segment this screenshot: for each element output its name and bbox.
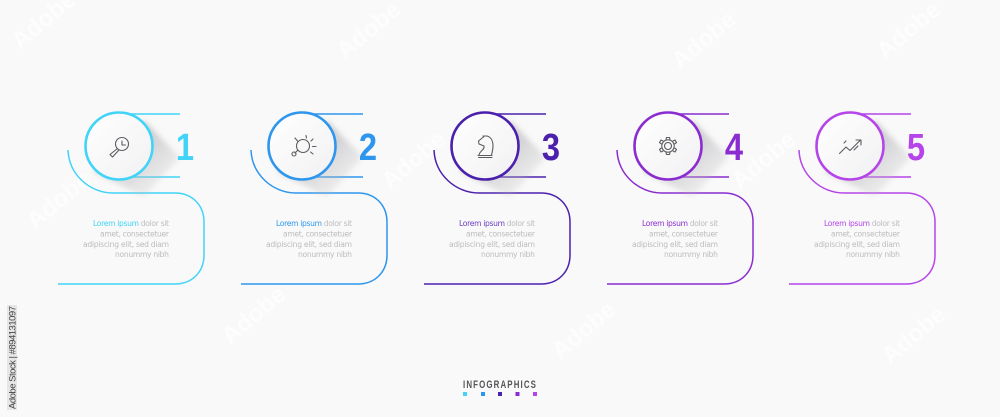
step 4 outline path [607, 150, 753, 284]
icon: light bulb [292, 136, 316, 156]
step 5 text: nonummy nibh [846, 250, 900, 259]
step 3 top and bottom lines [496, 114, 546, 177]
step 4 text: amet, consectetuer [649, 230, 719, 238]
step 2 outline path [241, 150, 387, 284]
step 1 [58, 112, 204, 284]
step 5 [789, 112, 935, 284]
text: Adobe [217, 281, 291, 350]
footer colour legend [463, 392, 537, 396]
step 4 circle [634, 112, 702, 180]
text: Adobe [667, 6, 741, 75]
step 1 text: adipiscing elit, sed diam [83, 240, 169, 249]
step 4 text: adipiscing elit, sed diam [632, 240, 718, 249]
step 1 text: Lorem ipsum dolor sit [93, 219, 169, 228]
step 3 outline path [424, 150, 570, 284]
step 1 text: amet, consectetuer [100, 230, 170, 238]
icon: magnifier with clock [110, 138, 128, 157]
text: Adobe [727, 126, 801, 195]
step 5 text: adipiscing elit, sed diam [814, 240, 900, 249]
number 3: 3 [542, 126, 560, 169]
step 2 [241, 112, 387, 284]
step 3 [424, 112, 570, 284]
step 2 text: adipiscing elit, sed diam [266, 240, 352, 249]
step 1 top and bottom lines [130, 114, 180, 177]
icon: trend arrow [840, 140, 861, 154]
step 4 text: Lorem ipsum dolor sit [642, 219, 718, 228]
step 4 circle shadow [643, 121, 729, 197]
step 1 circle [86, 112, 152, 180]
step 5 top and bottom lines [861, 114, 911, 177]
step 3 text: nonummy nibh [481, 250, 535, 259]
icon: gear [660, 138, 676, 154]
stock id label: Adobe Stock | #894131097 [8, 306, 18, 409]
text: Adobe [377, 126, 451, 195]
step 2 circle shadow [277, 121, 363, 197]
step 3 text: adipiscing elit, sed diam [449, 240, 535, 249]
step 2 top and bottom lines [313, 114, 363, 177]
step 5 circle [816, 112, 884, 180]
step 3 text: amet, consectetuer [466, 230, 536, 238]
number 5: 5 [907, 126, 925, 169]
step 1 circle shadow [94, 121, 180, 197]
step 3 text: Lorem ipsum dolor sit [459, 219, 535, 228]
number 4: 4 [725, 126, 743, 169]
step 1 text: nonummy nibh [115, 250, 169, 259]
step 4 top and bottom lines [679, 114, 729, 177]
icon: chess knight [478, 136, 493, 158]
step 3 circle [452, 112, 518, 180]
step 5 circle shadow [825, 121, 911, 197]
number 1: 1 [176, 126, 194, 169]
text: Adobe [547, 296, 621, 365]
step 2 text: amet, consectetuer [283, 230, 353, 238]
step 4 text: nonummy nibh [664, 250, 718, 259]
step 2 text: nonummy nibh [298, 250, 352, 259]
text: Adobe [22, 166, 96, 235]
step 3 circle shadow [460, 121, 546, 197]
step 5 text: Lorem ipsum dolor sit [824, 219, 900, 228]
step 5 outline path [789, 150, 935, 284]
footer title: INFOGRAPHICS [463, 379, 537, 391]
text: Adobe [877, 301, 951, 370]
step 5 text: amet, consectetuer [831, 230, 901, 238]
step 1 outline path [58, 150, 204, 284]
number 2: 2 [359, 126, 377, 169]
step 2 circle [268, 112, 336, 180]
step 4 [607, 112, 753, 284]
step 2 text: Lorem ipsum dolor sit [276, 219, 352, 228]
